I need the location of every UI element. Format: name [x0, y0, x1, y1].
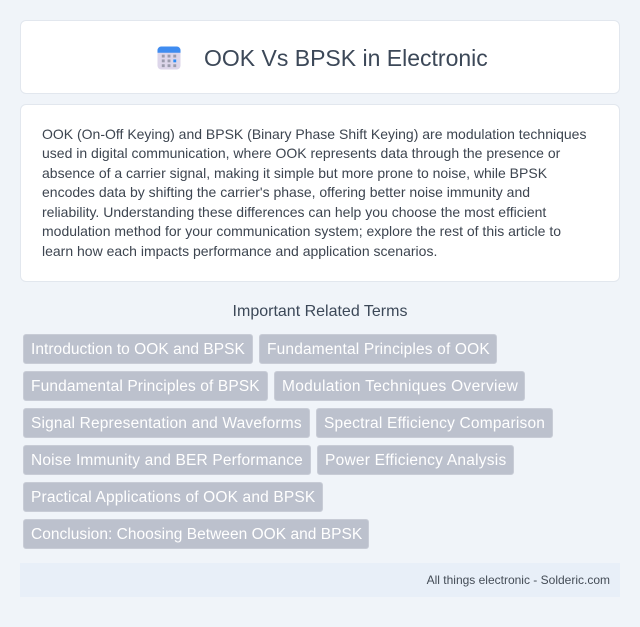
description text: modulation method for your communication system; explore the rest of this article to [42, 223, 561, 239]
header card [20, 20, 620, 94]
tag: Spectral Efficiency Comparison [324, 415, 545, 432]
tag: Practical Applications of OOK and BPSK [31, 489, 315, 506]
tag [317, 445, 514, 475]
description text: learn how each impacts performance and application scenarios. [42, 242, 437, 258]
tag [23, 482, 323, 512]
tag: Conclusion: Choosing Between OOK and BPSK [31, 526, 362, 543]
related terms tags [23, 334, 553, 549]
tag [23, 334, 253, 364]
tag [23, 371, 268, 401]
footer credit: All things electronic - Solderic.com [427, 573, 610, 587]
description text: absence of a carrier signal, making it simple but more prone to noise, while BPSK [42, 164, 547, 180]
tag [23, 408, 310, 438]
tag: Modulation Techniques Overview [282, 378, 518, 395]
tag [23, 445, 311, 475]
tag: Power Efficiency Analysis [325, 452, 506, 469]
tag: Noise Immunity and BER Performance [31, 452, 303, 469]
footer [20, 563, 620, 597]
description text: reliability. Understanding these differences can help you choose the most efficient [42, 204, 546, 220]
tag [23, 519, 369, 549]
tag [316, 408, 553, 438]
heading: important related terms: Important Related Terms [233, 303, 407, 320]
description text: encodes data by shifting the carrier's phase, offering better noise immunity and [42, 184, 530, 200]
tag: Introduction to OOK and BPSK [31, 341, 245, 358]
tag: Fundamental Principles of BPSK [31, 378, 260, 395]
tag: Signal Representation and Waveforms [31, 415, 302, 432]
title: OOK Vs BPSK in Electronic [204, 45, 488, 71]
icon: calendar [157, 46, 181, 70]
description text: OOK (On-Off Keying) and BPSK (Binary Phase Shift Keying) are modulation techniques [42, 126, 586, 142]
tag [274, 371, 525, 401]
panel: description [20, 104, 620, 282]
tag [259, 334, 497, 364]
description text: used in digital communication, where OOK represents data through the presence or [42, 145, 560, 161]
description text [42, 126, 586, 259]
tag: Fundamental Principles of OOK [267, 341, 490, 358]
